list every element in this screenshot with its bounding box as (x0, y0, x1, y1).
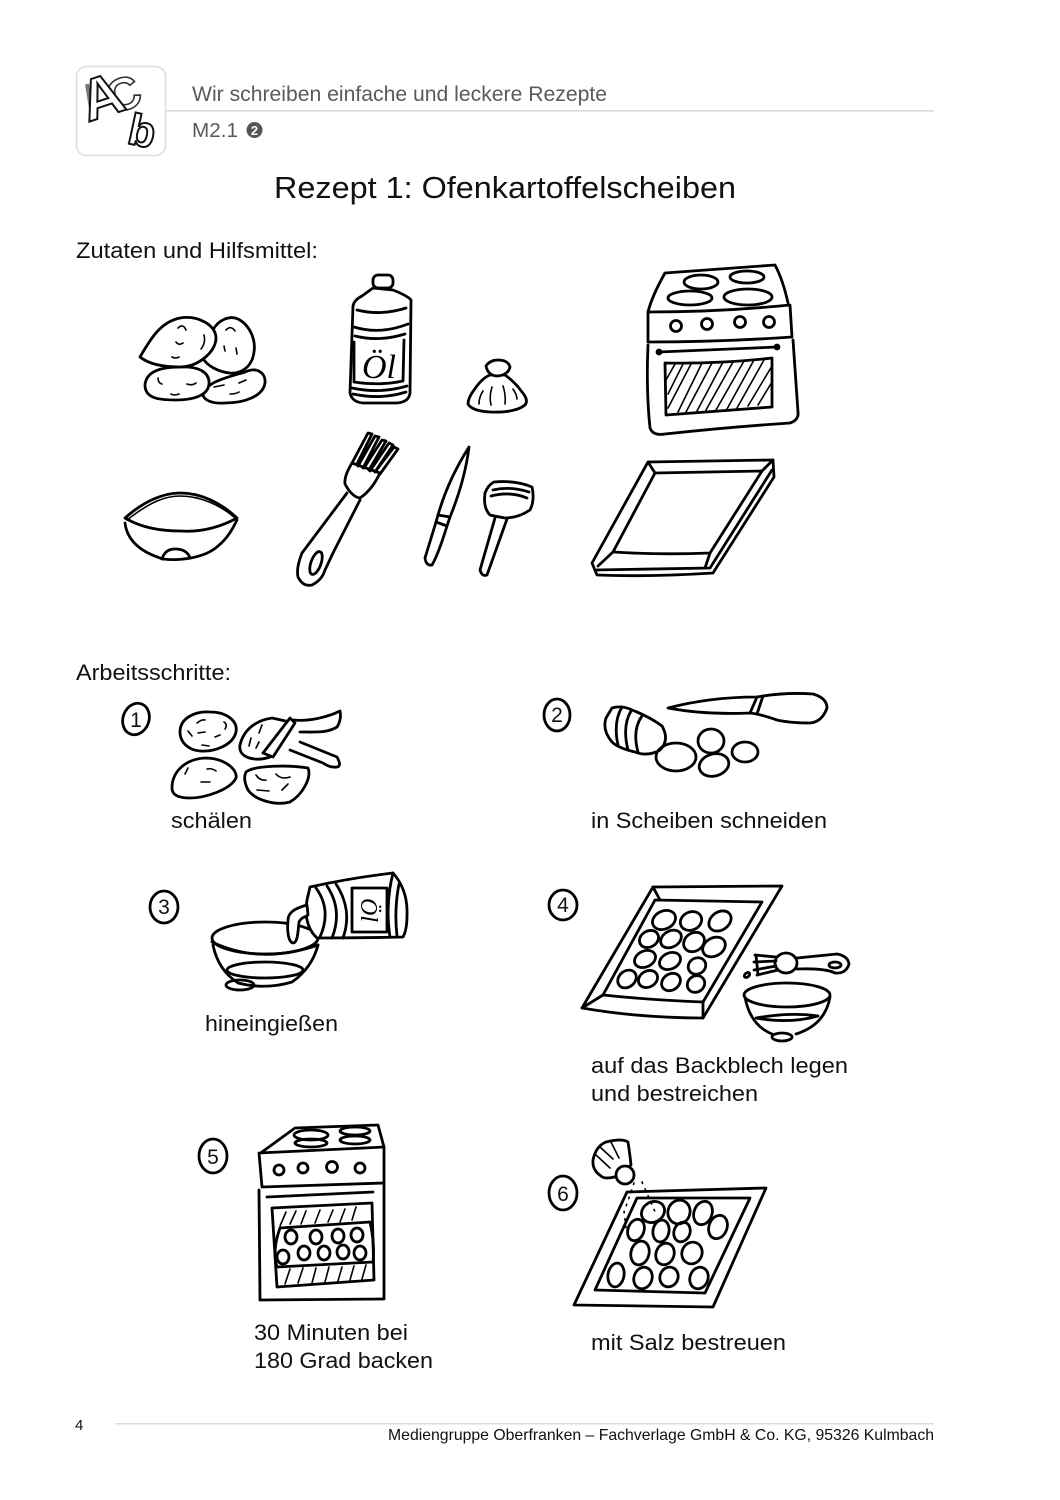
material code: 2 (251, 123, 258, 138)
step 6: salt (549, 1140, 786, 1355)
step number 6: 6 (557, 1183, 569, 1206)
step number 3 (150, 891, 178, 923)
caption: 30 Minuten bei 180 Grad backen (254, 1320, 433, 1373)
step number 4 (549, 890, 577, 920)
caption: schälen: schälen (171, 808, 252, 833)
icon: salt shaker (468, 360, 526, 412)
step number 5 (199, 1139, 227, 1173)
icon: oven (647, 265, 798, 434)
icon: potatoes (140, 317, 265, 403)
icon: knife (425, 447, 469, 565)
title: Rezept 1: Ofenkartoffelscheiben (274, 170, 736, 205)
caption: 30 Minuten bei 180 Grad backen: 30 Minuten bei (254, 1320, 408, 1345)
caption: auf das Backblech legen und bestreichen: und bestreichen (591, 1081, 758, 1106)
illustration: brush (743, 953, 849, 978)
heading: Zutaten und Hilfsmittel: Zutaten und Hilfsmittel: (76, 238, 318, 263)
publisher line: Mediengruppe Oberfranken – Fachverlage GmbH & Co. KG, 95326 Kulmbach (388, 1427, 934, 1444)
step 5: bake (199, 1125, 433, 1373)
page number: 4 (75, 1417, 83, 1434)
step 4: tray and brush (549, 886, 849, 1106)
icon: pastry brush (298, 433, 398, 585)
icon: baking tray (592, 460, 774, 576)
step number 5: 5 (207, 1146, 219, 1169)
header (72, 60, 934, 158)
icon: AGb logo: b (124, 105, 160, 158)
icon: mixing bowl (125, 493, 237, 560)
step number 6 (549, 1176, 577, 1210)
heading: Arbeitsschritte: Arbeitsschritte: (76, 660, 231, 685)
illustration: salt shaker over tray (574, 1140, 766, 1307)
step 3: pour oil (150, 873, 407, 1036)
caption: hineingießen: hineingießen (205, 1011, 338, 1036)
icon: AGb logo: A (72, 60, 132, 134)
footer (75, 1417, 934, 1444)
step 1: peel (118, 700, 340, 833)
caption: 30 Minuten bei 180 Grad backen: 180 Grad backen (254, 1348, 433, 1373)
header title: Wir schreiben einfache und leckere Rezepte (192, 82, 607, 106)
illustration: slicing potato (605, 693, 827, 780)
material code: M2.1 (192, 120, 238, 142)
step number 2: 2 (551, 704, 563, 727)
illustration: peeling potatoes (172, 711, 340, 803)
icon: peeler (480, 482, 533, 575)
illustration: pouring oil into bowl: Öl (355, 898, 381, 922)
caption: in Scheiben schneiden: in Scheiben schneiden (591, 808, 827, 833)
illustration: oven with tray (259, 1125, 384, 1300)
illustration: bowl (744, 983, 830, 1041)
step number 3: 3 (158, 896, 170, 919)
caption: mit Salz bestreuen: mit Salz bestreuen (591, 1330, 786, 1355)
caption: auf das Backblech legen und bestreichen: auf das Backblech legen (591, 1053, 848, 1078)
illustration: pouring oil into bowl (212, 873, 407, 990)
icon: AGb logo (72, 60, 166, 158)
illustration: slices on tray (582, 886, 782, 1018)
step 2: slice (544, 693, 827, 833)
step number 1 (118, 700, 154, 738)
caption: auf das Backblech legen und bestreichen (591, 1053, 848, 1106)
material code (192, 120, 262, 142)
step number 1: 1 (130, 709, 142, 732)
icon: oil bottle (350, 275, 411, 403)
icon: AGb logo: C (98, 64, 149, 124)
step number 2 (544, 699, 570, 731)
icon: oil bottle: Öl (362, 349, 396, 386)
panel: ingredients and tools (125, 265, 798, 585)
step number 4: 4 (557, 894, 569, 917)
